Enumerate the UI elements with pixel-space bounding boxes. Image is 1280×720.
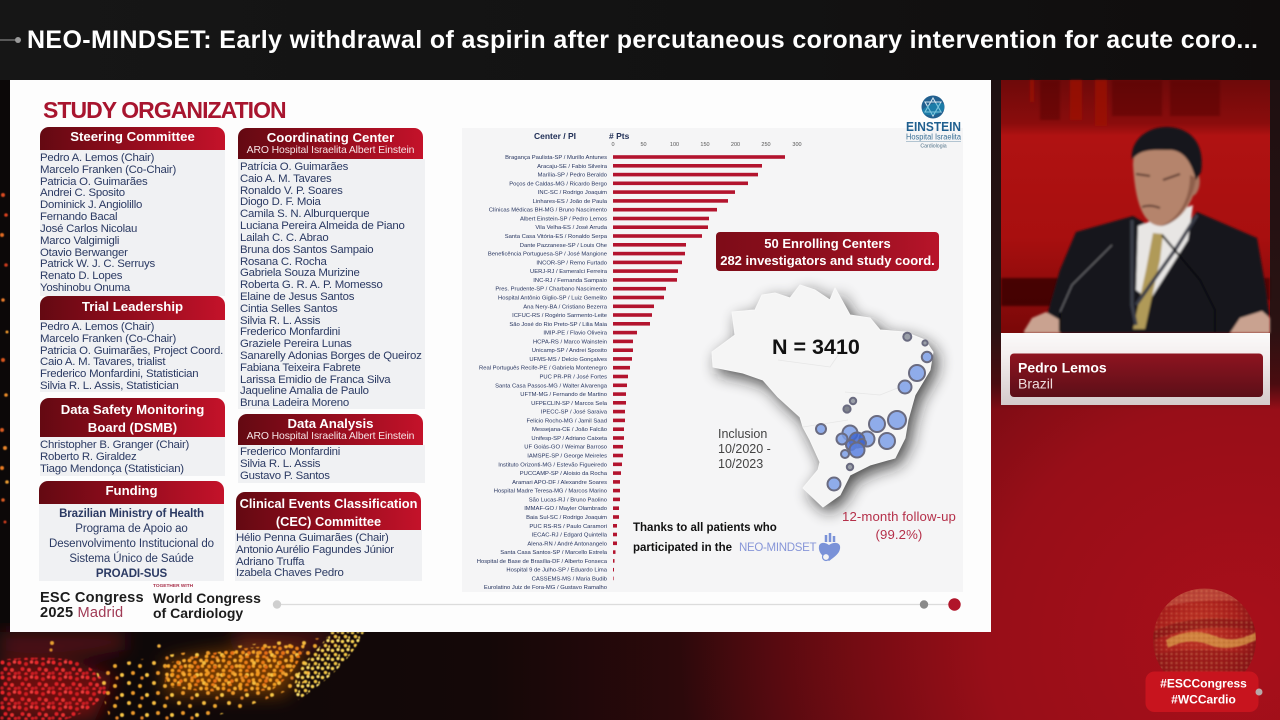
heading: coordinating center: Coordinating Center: [267, 130, 394, 145]
center labels: Alena-RN / André Antonangelo: [527, 541, 607, 547]
trial leadership members: Marcelo Franken (Co-Chair): [40, 333, 176, 345]
center labels: INCOR-SP / Remo Furtado: [536, 260, 607, 266]
center labels: Santa Casa Santos-SP / Marcello Estrela: [500, 550, 608, 556]
CEC members: Hélio Penna Guimarães (Chair): [236, 532, 389, 544]
center labels: Beneficência Portuguesa-SP / José Mangione: [488, 252, 607, 258]
funding text: Sistema Único de Saúde: [69, 553, 194, 565]
chart axis: 150: [700, 142, 710, 148]
footer logo: ESC Congress: [40, 590, 144, 621]
center labels: [477, 155, 608, 591]
center labels: Hospital Madre Teresa-MG / Marcos Marino: [494, 489, 607, 495]
coordinating center members: Fabiana Teixeira Fabrete: [240, 362, 361, 374]
podium: [1001, 333, 1270, 405]
center labels: PUC PR-PR / José Fortes: [539, 374, 607, 380]
name plate: [1010, 354, 1263, 397]
footer logo: World Congress of Cardiology: [153, 584, 261, 621]
panel: funding: [39, 481, 224, 581]
title: NEO-MINDSET: Early withdrawal of aspirin after percutaneous coronary intervention for acute coro...: [27, 26, 1258, 54]
slide: [10, 80, 991, 632]
heading: steering committee: [40, 127, 225, 150]
center labels: Linhares-ES / João de Paula: [533, 199, 608, 205]
hashtag box: #WCCardio: [1171, 692, 1236, 706]
chart axis: 200: [731, 142, 740, 148]
thanks note: Thanks to all patients who: [633, 522, 777, 534]
callout: enrolling centers: [716, 232, 939, 271]
inclusion dates: Inclusion: [718, 427, 767, 441]
funding text: Programa de Apoio ao: [75, 523, 188, 535]
panel: DSMB: [40, 398, 225, 476]
heading: coordinating center: ARO Hospital Israelita Albert Einstein: [247, 145, 414, 156]
center labels: PUC RS-RS / Paulo Caramori: [529, 524, 607, 530]
center labels: Ana Nery-BA / Cristiano Bezerra: [523, 304, 608, 310]
center labels: Pres. Prudente-SP / Charbano Nascimento: [495, 287, 607, 293]
coordinating center members: Rosana C. Rocha: [240, 256, 327, 268]
panel: steering committee: [40, 127, 225, 296]
center labels: IECAC-RJ / Edgard Quintella: [532, 532, 608, 538]
coordinating center members: Roberta G. R. A. P. Momesso: [240, 279, 383, 291]
logo: Einstein: [906, 96, 962, 150]
steering members: Fernando Bacal: [40, 211, 117, 223]
trial leadership members: [40, 321, 223, 392]
coordinating center members: Gabriela Souza Murizine: [240, 267, 360, 279]
data analysis members: Gustavo P. Santos: [240, 470, 330, 482]
speaker hair: [1132, 127, 1202, 180]
map site circles: [816, 333, 932, 490]
panel: trial leadership: [40, 296, 225, 392]
center labels: São Lucas-RJ / Bruno Paolino: [529, 497, 607, 503]
center labels: ICFUC-RS / Rogério Sarmento-Leite: [512, 313, 607, 319]
NEO-MINDSET wordmark: NEO-MINDSET: [739, 542, 816, 554]
center labels: Clínicas Médicas BH-MG / Bruno Nascimento: [489, 208, 607, 214]
center labels: CASSEMS-MS / Maria Budib: [532, 576, 607, 582]
center labels: Aracaju-SE / Fabio Silveira: [537, 164, 608, 170]
center labels: Unicamp-SP / Andrei Sposito: [532, 348, 607, 354]
center labels: Aramari APO-DF / Alexandre Soares: [512, 480, 607, 486]
center labels: Real Português Recife-PE / Gabriela Montenegro: [479, 366, 607, 372]
globe emblem and hashtags: [1146, 588, 1262, 712]
panel: coordinating center: [238, 128, 425, 409]
heading: steering committee: Steering Committee: [70, 129, 195, 144]
follow-up note: (99.2%): [876, 527, 922, 542]
heading: data analysis: Data Analysis: [287, 416, 374, 431]
center labels: IPECC-SP / José Saraiva: [541, 410, 608, 416]
steering members: [40, 152, 176, 294]
chart axis: 300: [792, 142, 802, 148]
bar chart: patients per center: [477, 131, 802, 591]
center labels: Vila Velha-ES / José Arruda: [535, 225, 608, 231]
follow-up note: 12-month follow-up: [842, 509, 956, 524]
center labels: Albert Einstein-SP / Pedro Lemos: [520, 216, 607, 222]
thanks note: [633, 522, 840, 562]
steering members: Marcelo Franken (Co-Chair): [40, 164, 176, 176]
chart axis: [611, 142, 802, 148]
center labels: Poços de Caldas-MG / Ricardo Bergo: [509, 181, 607, 187]
CEC members: [236, 532, 394, 579]
title bullet: [0, 37, 21, 43]
center labels: Santa Casa Vitória-ES / Ronaldo Serpa: [505, 234, 608, 240]
steering members: Yoshinobu Onuma: [40, 282, 130, 294]
center labels: Instituto Orizonti-MG / Estevão Figueiredo: [498, 462, 607, 468]
chart axis: 50: [640, 142, 647, 148]
steering members: José Carlos Nicolau: [40, 223, 137, 235]
microphones: [1060, 235, 1215, 332]
DSMB members: Christopher B. Granger (Chair): [40, 439, 189, 451]
video: speaker: [1001, 78, 1272, 405]
DSMB members: Tiago Mendonça (Statistician): [40, 463, 184, 475]
logo: Einstein: Hospital Israelita: [906, 132, 962, 142]
name plate: Brazil: [1018, 376, 1053, 392]
heading: funding: [39, 481, 224, 504]
steering members: Dominick J. Angiolillo: [40, 199, 142, 211]
steering members: Pedro A. Lemos (Chair): [40, 152, 154, 164]
title bar: [0, 26, 1258, 54]
center labels: IMMAF-GO / Mayler Olambrado: [524, 506, 607, 512]
DSMB members: Roberto R. Giraldez: [40, 451, 136, 463]
chart axis: 0: [611, 142, 615, 148]
coordinating center members: Sanarelly Adonias Borges de Queiroz: [240, 350, 422, 362]
N = 3410: N = 3410: [772, 335, 860, 359]
coordinating center members: Luciana Pereira Almeida de Piano: [240, 220, 405, 232]
inclusion dates: 10/2020 -: [718, 442, 771, 456]
center labels: IMIP-PE / Flavio Oliveira: [543, 331, 608, 337]
coordinating center members: Diogo D. F. Moia: [240, 196, 321, 208]
steering members: Marco Valgimigli: [40, 235, 119, 247]
footer logo: ESC Congress: ESC Congress: [40, 590, 144, 606]
coordinating center members: Camila S. N. Alburquerque: [240, 208, 369, 220]
center labels: Unifesp-SP / Adriano Caixeta: [531, 436, 608, 442]
center labels: Santa Casa Passos-MG / Walter Alvarenga: [495, 383, 608, 389]
coordinating center members: Patrícia O. Guimarães: [240, 161, 348, 173]
trial leadership members: Pedro A. Lemos (Chair): [40, 321, 154, 333]
heading: trial leadership: [40, 296, 225, 320]
DSMB members: [40, 439, 189, 475]
follow-up note: [842, 509, 956, 542]
trial leadership members: Silvia R. L. Assis, Statistician: [40, 380, 179, 392]
steering members: Andrei C. Sposito: [40, 187, 125, 199]
footer logo: World Congress of Cardiology: TOGETHER WITH: [153, 584, 193, 589]
heading: trial leadership: Trial Leadership: [82, 299, 183, 314]
center labels: INC-RJ / Fernanda Sampaio: [533, 278, 607, 284]
center labels: Felicio Rocho-MG / Jamil Saad: [526, 418, 607, 424]
trial leadership members: Patricia O. Guimarães, Project Coord.: [40, 345, 223, 357]
footer logo: World Congress of Cardiology: World Congress: [153, 590, 261, 606]
footer logo: ESC Congress: 2025 Madrid: [40, 605, 123, 621]
center labels: Hospital Antônio Giglio-SP / Luiz Gemelito: [498, 296, 607, 302]
chart column headers: Center / PI: [534, 131, 576, 141]
coordinating center members: [240, 161, 422, 409]
speaker shirt: [1136, 205, 1193, 300]
heading: study organization: STUDY ORGANIZATION: [43, 97, 286, 123]
heading: coordinating center: [238, 128, 423, 159]
callout: enrolling centers: 50 Enrolling Centers: [764, 236, 891, 251]
logo: Einstein: EINSTEIN: [906, 120, 961, 134]
hashtag box: #ESCCongress: [1160, 676, 1247, 690]
map of Brazil: [706, 281, 950, 522]
CEC members: Izabela Chaves Pedro: [236, 567, 344, 579]
center labels: UFTM-MG / Fernando de Martino: [520, 392, 607, 398]
chart column headers: # Pts: [609, 131, 630, 141]
heading: DSMB: [40, 398, 225, 437]
coordinating center members: Bruna dos Santos Sampaio: [240, 244, 373, 256]
globe: [1153, 588, 1256, 672]
bars: [613, 155, 785, 580]
inclusion dates: [718, 427, 771, 471]
speaker head: [1133, 137, 1198, 226]
panel: enrolment chart and map background: [462, 128, 963, 592]
hashtag box: [1146, 672, 1258, 712]
funding text: Desenvolvimento Institucional do: [49, 538, 214, 550]
heading: DSMB: Board (DSMB): [88, 420, 177, 434]
center labels: Baia Sul-SC / Rodrigo Joaquim: [526, 515, 607, 521]
coordinating center members: Jaqueline Amalia de Paulo: [240, 385, 369, 397]
center labels: UFPECLIN-SP / Marcos Sela: [531, 401, 608, 407]
center labels: Messejana-CE / João Falcão: [532, 427, 607, 433]
coordinating center members: Bruna Ladeira Moreno: [240, 397, 349, 409]
coordinating center members: Lailah C. C. Abrao: [240, 232, 328, 244]
center labels: Eurolatino Juiz de Fora-MG / Gustavo Ramalho: [484, 585, 607, 591]
chart axis: 250: [761, 142, 771, 148]
chart column headers: [534, 131, 630, 141]
speaker lanyard: [1132, 215, 1197, 325]
center labels: Bragança Paulista-SP / Murillo Antunes: [505, 155, 607, 161]
center labels: Hospital de Base de Brasília-DF / Alberto Fonseca: [477, 559, 608, 565]
center labels: HCPA-RS / Marco Wainstein: [533, 339, 607, 345]
center labels: São José do Rio Preto-SP / Lilia Maia: [509, 322, 608, 328]
heading: DSMB: Data Safety Monitoring: [61, 402, 204, 417]
funding text: [49, 508, 214, 580]
coordinating center members: Caio A. M. Tavares: [240, 173, 331, 185]
inclusion dates: 10/2023: [718, 457, 763, 471]
progress slider: [272, 598, 961, 611]
coordinating center members: Graziele Pereira Lunas: [240, 338, 352, 350]
panel: CEC committee: [235, 492, 422, 581]
center labels: PUCCAMP-SP / Aloisio da Rocha: [520, 471, 608, 477]
icon: heart: [818, 533, 840, 562]
data analysis members: Frederico Monfardini: [240, 446, 340, 458]
footer logo: World Congress of Cardiology: of Cardiology: [153, 604, 243, 620]
thanks note: participated in the: [633, 542, 732, 554]
speaker tie: [1133, 233, 1163, 329]
speaker body: [1048, 212, 1269, 333]
center labels: UF Goiás-GO / Weimar Barroso: [524, 445, 607, 451]
logo: Einstein: Cardiologia: [920, 144, 947, 150]
center labels: UERJ-RJ / Esmeralci Ferreira: [530, 269, 608, 275]
steering members: Patricia O. Guimarães: [40, 176, 147, 188]
speaker hands: [1024, 312, 1060, 333]
coordinating center members: Silvia R. L. Assis: [240, 315, 320, 327]
coordinating center members: Elaine de Jesus Santos: [240, 291, 354, 303]
steering members: Patrick W. J. C. Serruys: [40, 258, 155, 270]
heading: CEC committee: [236, 492, 421, 530]
center labels: UFMS-MS / Delcio Gonçalves: [529, 357, 607, 363]
center labels: INC-SC / Rodrigo Joaquim: [538, 190, 607, 196]
heading: data analysis: [238, 414, 423, 445]
coordinating center members: Frederico Monfardini: [240, 326, 340, 338]
heading: CEC committee: (CEC) Committee: [276, 514, 381, 529]
funding text: PROADI-SUS: [96, 568, 167, 580]
trial leadership members: Frederico Monfardini, Statistician: [40, 368, 198, 380]
center labels: Dante Pazzanese-SP / Louis Ohe: [520, 243, 607, 249]
steering members: Renato D. Lopes: [40, 270, 122, 282]
funding text: Brazilian Ministry of Health: [59, 508, 204, 520]
data analysis members: Silvia R. L. Assis: [240, 458, 320, 470]
center labels: Hospital 9 de Julho-SP / Eduardo Lima: [506, 568, 608, 574]
trial leadership members: Caio A. M. Tavares, trialist: [40, 356, 165, 368]
data analysis members: [240, 446, 340, 482]
coordinating center members: Ronaldo V. P. Soares: [240, 185, 343, 197]
coordinating center members: Cintia Selles Santos: [240, 303, 338, 315]
heading: CEC committee: Clinical Events Classification: [240, 496, 417, 511]
panel: data analysis: [238, 414, 425, 483]
steering members: Otavio Berwanger: [40, 246, 128, 258]
CEC members: Adriano Truffa: [236, 556, 304, 568]
heading: funding: Funding: [106, 483, 158, 498]
heading: data analysis: ARO Hospital Israelita Albert Einstein: [247, 431, 414, 442]
CEC members: Antonio Aurélio Fagundes Júnior: [236, 544, 394, 556]
coordinating center members: Larissa Emidio de Franca Silva: [240, 374, 390, 386]
center labels: Marília-SP / Pedro Beraldo: [538, 173, 607, 179]
center labels: IAMSPE-SP / George Meireles: [527, 454, 607, 460]
name plate: Pedro Lemos: [1018, 360, 1107, 376]
callout: enrolling centers: 282 investigators and study coord.: [720, 253, 935, 268]
chart axis: 100: [670, 142, 679, 148]
